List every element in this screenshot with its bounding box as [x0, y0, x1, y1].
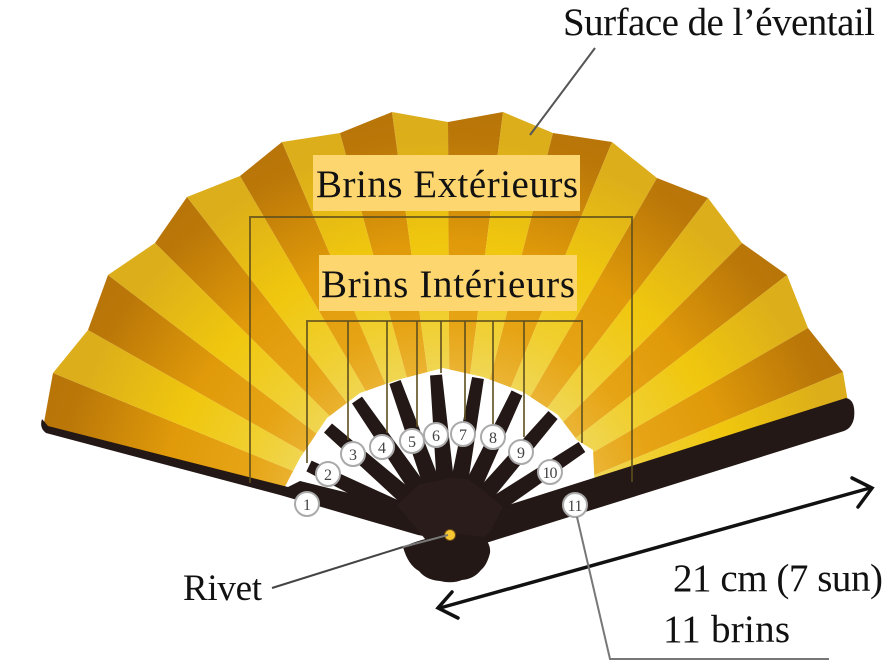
- rivet cap: [403, 533, 490, 582]
- label: Brins Intérieurs: Brins Intérieurs: [321, 263, 575, 306]
- marker numbers: 5: [408, 434, 416, 451]
- marker numbers: 6: [432, 428, 440, 445]
- marker numbers: 9: [517, 445, 525, 462]
- marker numbers: 4: [378, 440, 386, 457]
- marker numbers: 7: [459, 427, 467, 444]
- length arrow: [438, 478, 872, 618]
- inner sticks: [306, 374, 585, 544]
- label: Rivet: Rivet: [183, 568, 263, 609]
- marker numbers: 1: [303, 497, 311, 514]
- label: 21 cm (7 sun): 21 cm (7 sun): [673, 557, 883, 600]
- leader line: fan surface: [530, 48, 595, 135]
- label: Surface de l'éventail: Surface de l’éventail: [563, 1, 875, 44]
- label: Brins Extérieurs: Brins Extérieurs: [316, 163, 578, 206]
- right guard stick: [452, 398, 854, 548]
- leader line: 11 brins: [577, 517, 829, 659]
- leader line: rivet: [272, 535, 448, 588]
- marker numbers: [303, 427, 582, 515]
- fan surface: [43, 112, 848, 535]
- marker numbers: 8: [489, 430, 497, 447]
- rivet pin: [444, 530, 456, 540]
- left guard stick: [41, 419, 450, 540]
- inner sticks bracket: [307, 321, 582, 463]
- marker numbers: 2: [324, 467, 332, 484]
- stick hub: [397, 478, 503, 548]
- marker numbers: 10: [542, 465, 558, 482]
- marker numbers: 3: [349, 447, 357, 464]
- label: 11 brins: 11 brins: [663, 608, 790, 651]
- marker numbers: 11: [568, 498, 582, 515]
- numbered stick markers: [295, 422, 587, 517]
- outer sticks bracket: [250, 217, 632, 483]
- white inner leaf: [280, 368, 595, 560]
